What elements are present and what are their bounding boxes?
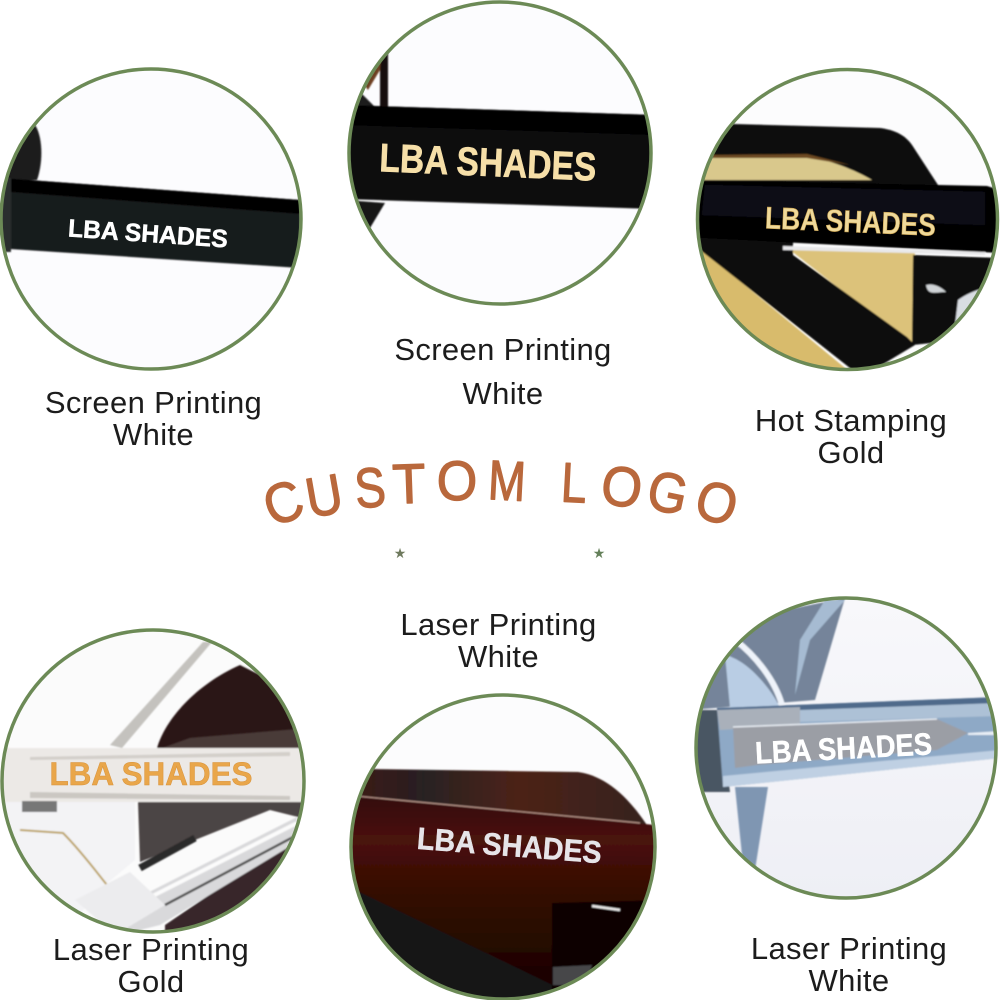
photo: blue transparent frame [690, 598, 1000, 870]
panel: laser printing white, tortoise frame [345, 695, 665, 1000]
photo: black temple arm and lens edge [345, 48, 655, 228]
decorative stars under title [394, 546, 605, 562]
panel: laser printing white, blue clear frame [690, 598, 1000, 898]
panel: laser printing gold, clear frame [0, 630, 310, 940]
logo text: cream print: LBA SHADES [379, 136, 597, 190]
photo: black frame with yellow lens [690, 124, 1000, 372]
panel: screen printing white, black temple [0, 69, 301, 369]
title: curved custom logo: S [352, 455, 388, 520]
label: screen printing white, left: Screen Printing [45, 385, 262, 420]
panel: screen printing white, gold-tone logo [345, 2, 655, 304]
title: curved custom logo: T [391, 452, 427, 516]
logo text: white engraving: LBA SHADES [754, 726, 933, 771]
label: laser printing white, right: White [808, 963, 890, 998]
title: curved custom logo: M [487, 448, 527, 513]
decorative stars under title: ★ [593, 546, 605, 562]
label: screen printing white, centre: White [462, 376, 544, 411]
title: curved custom logo: O [437, 450, 477, 512]
title: curved custom logo: O [689, 468, 745, 539]
photo: transparent frame with dark lens [0, 642, 310, 940]
title: curved custom logo: O [597, 454, 646, 521]
decorative stars under title: ★ [394, 546, 406, 562]
logo text: white print: LBA SHADES [416, 821, 603, 870]
label: laser printing white, centre: Laser Printing [400, 607, 597, 642]
title: curved custom logo: U [301, 463, 348, 530]
logo text: white print: LBA SHADES [67, 214, 229, 254]
panel: hot stamping gold [690, 70, 1000, 372]
label: laser printing gold: Laser Printing [53, 932, 249, 967]
logo text: gold foil: LBA SHADES [764, 200, 937, 243]
photo: tortoise frame [345, 769, 665, 1000]
photo: black temple arm [0, 125, 300, 268]
label: laser printing gold: Gold [118, 964, 184, 999]
label: laser printing white, right: Laser Printing [751, 931, 947, 966]
title: curved custom logo: L [560, 451, 588, 515]
title: curved custom logo: C [255, 468, 312, 539]
title: curved custom logo: G [642, 459, 693, 528]
title: curved custom logo [255, 448, 745, 539]
label: screen printing white, left: White [113, 417, 194, 452]
logo text: orange print: LBA SHADES [50, 756, 252, 792]
label: screen printing white, centre: Screen Printing [394, 332, 612, 367]
label: hot stamping gold: Gold [818, 435, 884, 470]
label: hot stamping gold: Hot Stamping [755, 403, 947, 438]
label: laser printing white, centre: White [458, 639, 539, 674]
